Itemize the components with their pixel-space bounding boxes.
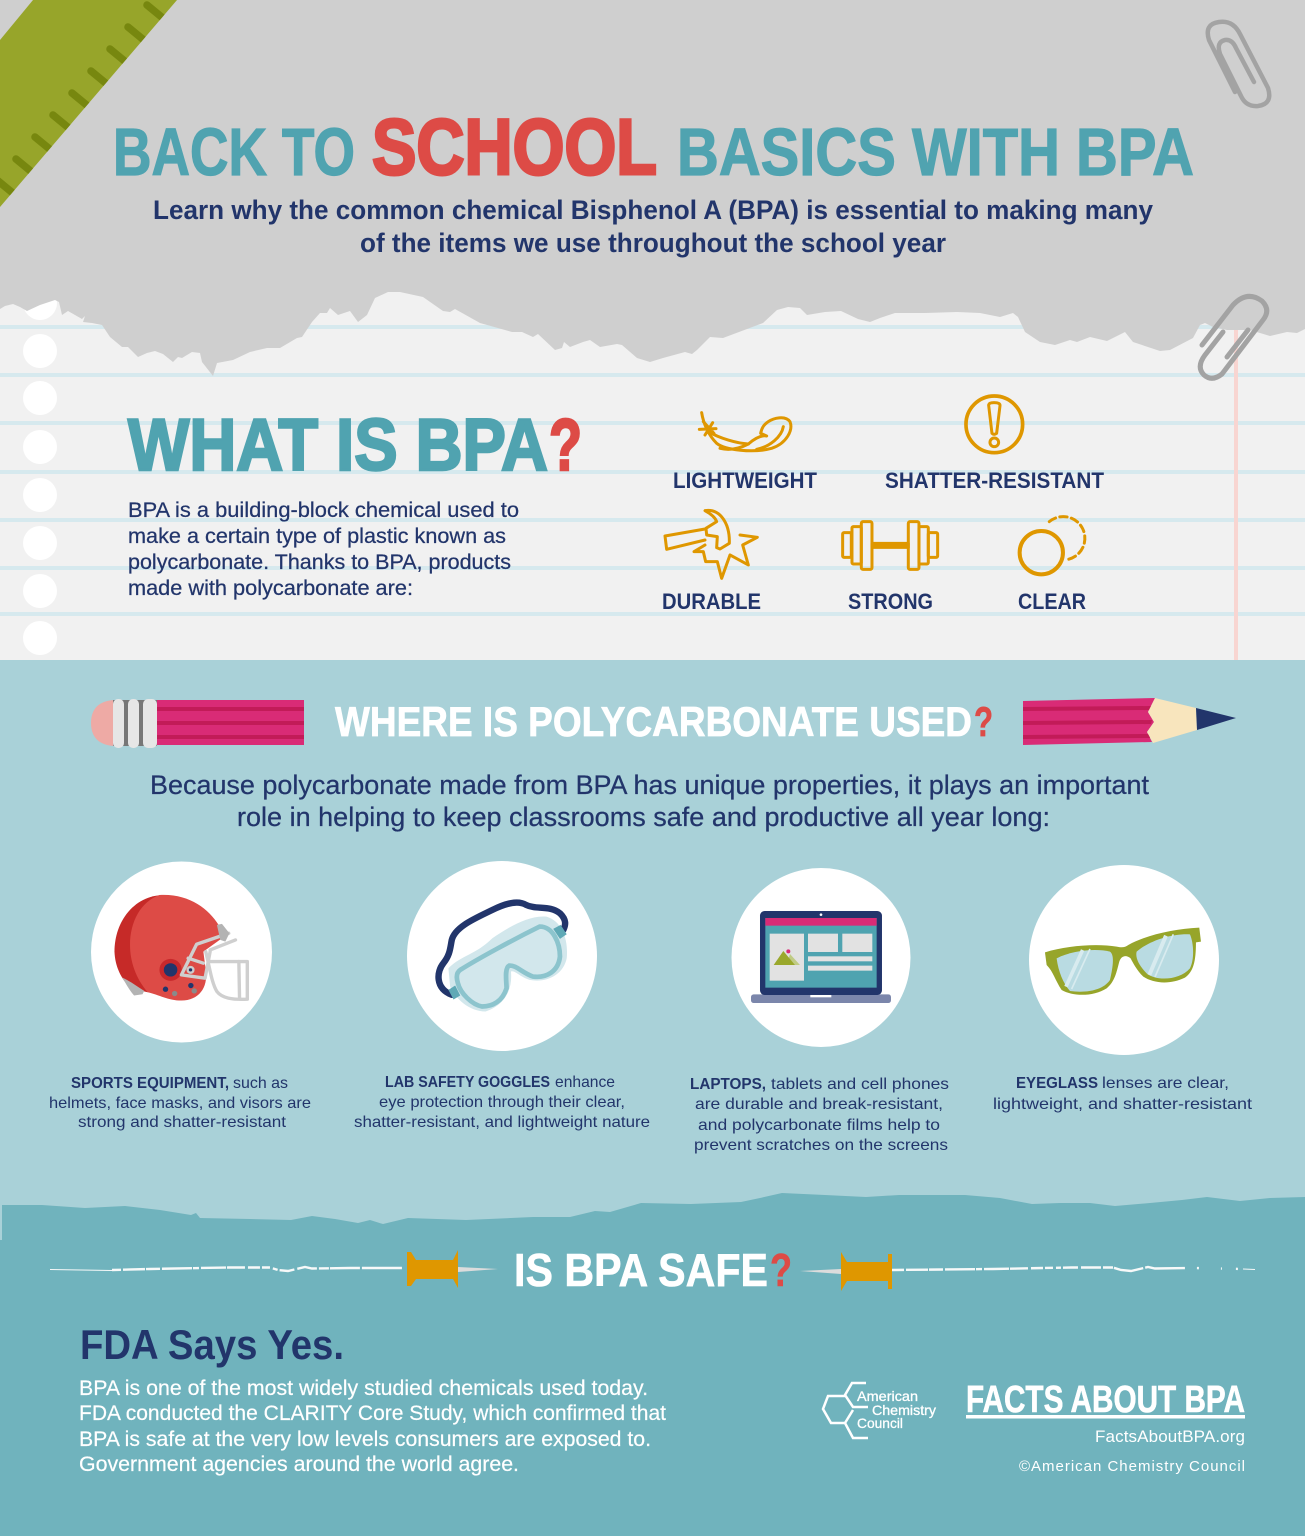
heading: where is polycarbonate used: ? [974,698,993,745]
icon: push pin right [800,1252,892,1291]
text: BPA definition [128,499,519,600]
heading: what is BPA: ? [549,405,582,486]
text: website: FactsAboutBPA.org [1095,1427,1245,1446]
caption: sports equipment: SPORTS EQUIPMENT, [71,1075,229,1092]
caption: laptops: and polycarbonate films help to [698,1117,940,1134]
caption: lab safety goggles: LAB SAFETY GOGGLES [385,1074,550,1091]
panel: where is polycarbonate used [0,660,1305,1250]
icon: pencil tip end [1023,698,1236,745]
caption: laptops: prevent scratches on the screens [694,1137,948,1154]
property labels: DURABLE [662,589,761,614]
icon: laptop [751,911,891,1003]
icon: hammer [665,510,757,578]
logo: American Chemistry Council [823,1383,936,1438]
caption: eyeglass [993,1075,1253,1113]
icon: dumbbell [843,522,938,569]
icon: paperclip on paper [1200,296,1267,378]
icon: alert [966,396,1023,453]
heading: FDA says yes: FDA Says Yes. [80,1321,344,1368]
text: polycarbonate intro [150,770,1149,832]
panel: is BPA safe [0,1193,1305,1536]
text: BPA definition: BPA is a building-block chemical used to [128,499,519,522]
logo: American Chemistry Council: Chemistry [872,1402,936,1418]
caption: sports equipment: strong and shatter-resistant [78,1114,287,1131]
properties icons [665,396,1085,578]
caption: sports equipment: such as [233,1075,288,1092]
logo: American Chemistry Council: Council [857,1415,903,1431]
icon: eyeglasses [1045,928,1201,995]
icon: paperclip top [1208,22,1269,106]
title: BACK TO [113,115,355,190]
title: BASICS WITH BPA [677,115,1194,190]
item: goggles circle [407,861,597,1051]
logo: American Chemistry Council: American [857,1388,918,1404]
icon: clear circles [1020,517,1085,574]
property labels [662,468,1105,614]
property labels: STRONG [848,589,933,614]
panel: torn grey header [0,0,1305,376]
subtitle: Learn why the common chemical Bisphenol A (BPA) is essential to making many [153,195,1153,225]
caption: lab safety goggles: enhance [555,1074,615,1091]
caption: eyeglass: lightweight, and shatter-resistant [993,1096,1253,1113]
caption: eyeglass: EYEGLASS [1016,1075,1098,1092]
heading: is BPA safe: ? [770,1244,792,1296]
icon: football helmet [114,895,247,1001]
text: copyright: ©American Chemistry Council [1019,1458,1245,1475]
caption: laptops: LAPTOPS, [690,1076,766,1093]
item: laptop circle [732,868,910,1047]
heading: is BPA safe: IS BPA SAFE [514,1244,768,1296]
heading: where is polycarbonate used: WHERE IS POLYCARBONATE USED [335,698,972,745]
text: polycarbonate intro: role in helping to keep classrooms safe and productive all year long: [237,802,1050,832]
caption: sports equipment: helmets, face masks, and visors are [49,1095,311,1112]
torn white strip left [50,1267,408,1271]
icon: feather [699,413,791,451]
text: FDA explanation: Government agencies around the world agree. [79,1453,519,1476]
text: BPA definition: made with polycarbonate are: [128,577,413,600]
text: polycarbonate intro: Because polycarbonate made from BPA has unique properties, it plays an important [150,770,1149,800]
title [113,102,1194,191]
text: FDA explanation [79,1377,666,1476]
caption: laptops: are durable and break-resistant, [695,1096,943,1113]
caption: lab safety goggles [354,1074,650,1131]
subtitle [153,195,1153,258]
panel: notebook paper [0,280,1305,660]
caption: lab safety goggles: eye protection through their clear, [379,1094,625,1111]
caption: lab safety goggles: shatter-resistant, and lightweight nature [354,1114,650,1131]
icon: push pin left [407,1250,498,1288]
caption: eyeglass: lenses are clear, [1102,1075,1229,1092]
icon: safety goggles [439,903,567,1012]
item: eyeglasses circle [1029,865,1219,1055]
property labels: LIGHTWEIGHT [673,468,818,493]
caption: laptops [690,1076,949,1154]
text: BPA definition: polycarbonate. Thanks to BPA, products [128,551,511,574]
item: helmet circle [91,862,272,1042]
subtitle: of the items we use throughout the school year [360,228,946,258]
property labels: SHATTER-RESISTANT [885,468,1105,493]
title: SCHOOL [372,102,657,191]
property labels: CLEAR [1018,589,1086,614]
icon: pencil eraser end [91,699,304,748]
heading: what is BPA: WHAT IS BPA [128,405,548,486]
text: FDA explanation: FDA conducted the CLARITY Core Study, which confirmed that [79,1402,666,1425]
caption: sports equipment [49,1075,311,1131]
text: FDA explanation: BPA is safe at the very low levels consumers are exposed to. [79,1428,651,1451]
ruler [0,0,177,207]
text: FDA explanation: BPA is one of the most widely studied chemicals used today. [79,1377,648,1400]
caption: laptops: tablets and cell phones [771,1076,949,1093]
text: BPA definition: make a certain type of plastic known as [128,525,506,548]
torn white strip right [892,1267,1255,1271]
